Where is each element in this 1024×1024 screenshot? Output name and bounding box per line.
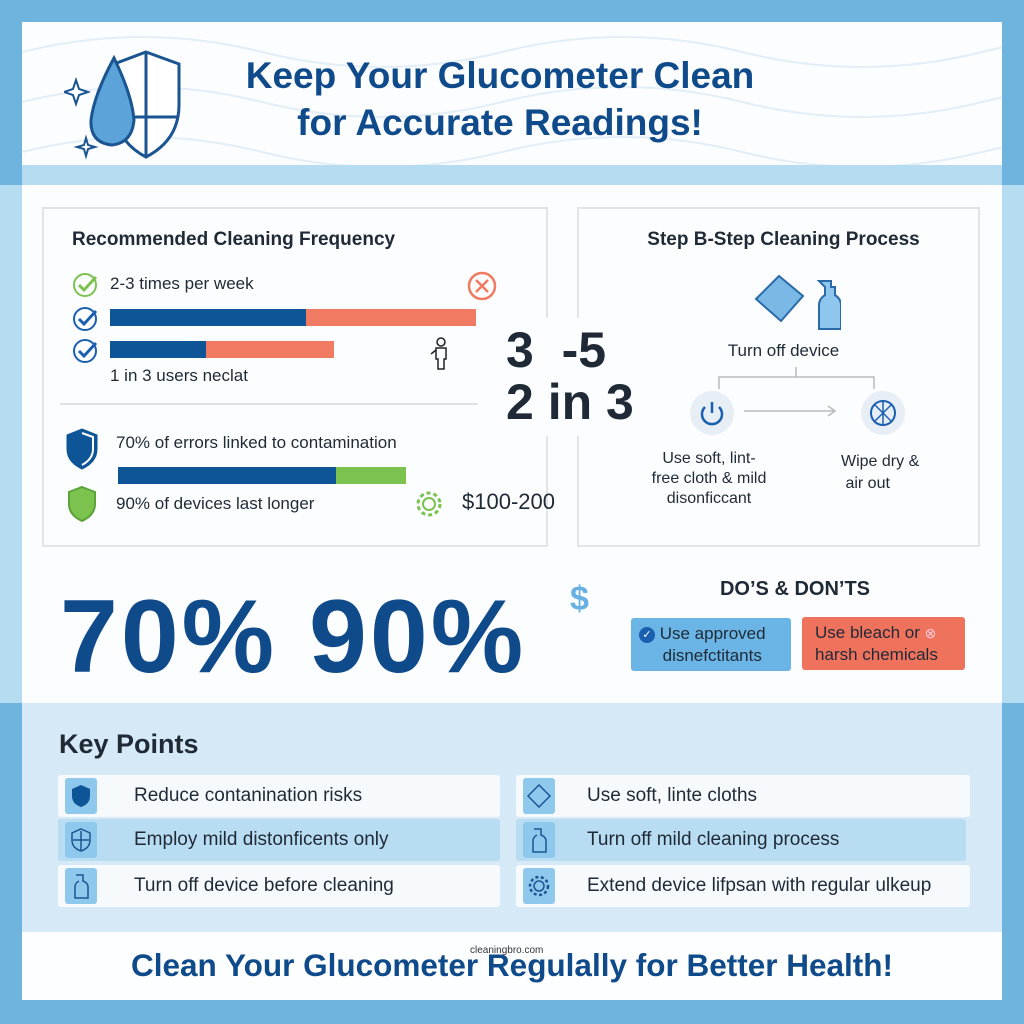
heading: Step B-Step Cleaning Process — [647, 229, 920, 250]
do box: ✓ — [642, 629, 652, 641]
panel: key points: Employ mild distonficents only — [134, 829, 388, 850]
do box: disnefctitants — [663, 646, 762, 665]
don't box — [802, 617, 965, 670]
frequency rows: 2-3 times per week — [110, 274, 254, 293]
panel: do's and don'ts: DO’S & DON’TS — [720, 578, 870, 600]
stats rows: 90% of devices last longer — [116, 494, 314, 513]
do box — [631, 618, 791, 671]
stats rows — [66, 428, 555, 522]
do box: Use approved — [660, 624, 766, 643]
title: for Accurate Readings! — [297, 102, 703, 143]
frequency rows — [73, 273, 476, 385]
panel: cleaning frequency — [42, 207, 548, 547]
panel: step by step: Use soft, lint- — [662, 450, 756, 467]
big numbers: 3-5 / 2 in 3 — [478, 318, 653, 436]
flow connectors — [718, 367, 875, 416]
panel: step by step: free cloth & mild — [652, 470, 766, 487]
big numbers: 3-5 / 2 in 3: 3 -5 — [506, 322, 606, 378]
panel: key points: Turn off device before cleaning — [134, 875, 394, 896]
stats rows: 70% of errors linked to contamination — [116, 433, 397, 452]
key point items: Reduce contanination risks — [134, 785, 362, 806]
panel: key points: Extend device lifpsan with regular ulkeup — [587, 875, 931, 896]
title: Keep Your Glucometer Clean — [246, 55, 754, 96]
icon: cloth and spray — [754, 274, 841, 330]
icon: person — [430, 337, 447, 370]
panel: step by step: Turn off device — [728, 341, 839, 360]
icon: power — [690, 391, 734, 435]
header panel — [22, 22, 1002, 165]
big percentages: 70% 90% — [60, 579, 526, 695]
title — [246, 55, 754, 143]
panel: step by step — [577, 207, 980, 547]
panel: step by step: Wipe dry & — [841, 453, 919, 470]
icon: fan — [861, 391, 905, 435]
icon: cross — [468, 272, 496, 300]
panel: key points — [22, 703, 1002, 932]
frequency rows: 1 in 3 users neclat — [110, 366, 248, 385]
watermark: cleaningbro.com — [470, 945, 543, 956]
icon: dollar: $ — [570, 580, 589, 618]
big numbers: 3-5 / 2 in 3: 2 in 3 — [506, 374, 634, 430]
heading: Recommended Cleaning Frequency — [72, 229, 395, 250]
panel: step by step: disonficcant — [667, 490, 751, 507]
footer slogan: Clean Your Glucometer Regulally for Better Health! — [131, 947, 893, 983]
heading: Key Points — [59, 729, 199, 759]
stats rows: $100-200 — [462, 489, 555, 514]
don't box: Use bleach or ⊗ — [815, 623, 936, 642]
panel: step by step: air out — [845, 475, 890, 492]
panel: do's and don'ts — [631, 578, 965, 671]
panel: key points: Use soft, linte cloths — [587, 785, 757, 806]
footer — [22, 932, 1002, 1000]
icon: drop and shield — [64, 50, 180, 160]
panel: key points: Turn off mild cleaning process — [587, 829, 839, 850]
key point items — [58, 775, 500, 817]
don't box: harsh chemicals — [815, 645, 938, 664]
